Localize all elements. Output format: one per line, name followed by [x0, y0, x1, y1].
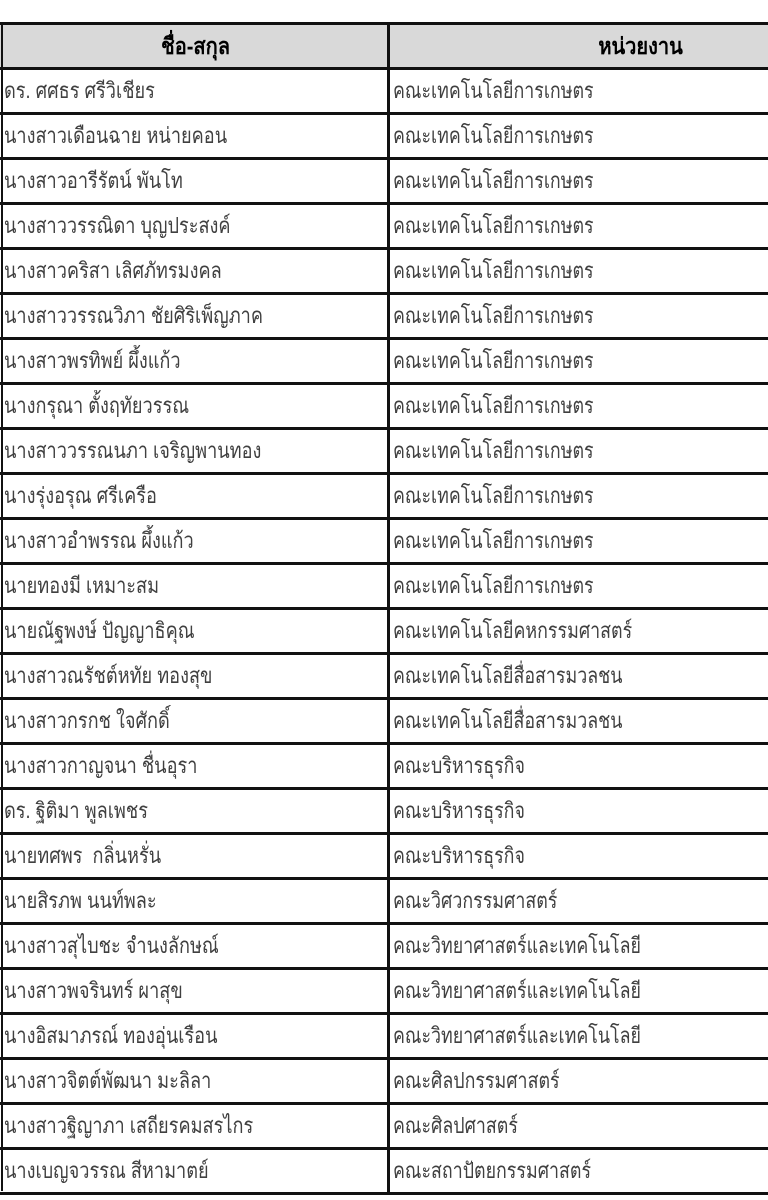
table: names and departments: คณะเทคโนโลยีคหกรรมศาสตร์	[392, 618, 632, 643]
table: names and departments: นายทองมี เหมาะสม	[4, 573, 159, 598]
table: names and departments: ชื่อ-สกุล	[161, 32, 230, 58]
table: names and departments: คณะเทคโนโลยีสื่อสารมวลชน	[392, 663, 622, 688]
table: names and departments: ดร. ศศธร ศรีวิเชียร	[4, 78, 155, 103]
table: names and departments: คณะเทคโนโลยีการเกษตร	[392, 483, 593, 508]
table: names and departments: นางสาววรรณิดา บุญประสงค์	[4, 213, 231, 238]
table: names and departments: นางรุ่งอรุณ ศรีเครือ	[4, 483, 157, 508]
table: names and departments: คณะบริหารธุรกิจ	[392, 798, 524, 823]
table: names and departments: นางสาววรรณนภา เจริญพานทอง	[4, 438, 261, 463]
table: names and departments: นางสาวพจรินทร์ ผาสุข	[4, 978, 183, 1003]
table: names and departments: นางสาวกาญจนา ชื่นอุรา	[4, 753, 197, 778]
table: names and departments: คณะบริหารธุรกิจ	[392, 843, 524, 868]
table: names and departments: นางสาวจิตต์พัฒนา มะลิลา	[4, 1068, 211, 1093]
table: names and departments: คณะเทคโนโลยีการเกษตร	[392, 213, 593, 238]
table: names and departments: นางเบญจวรรณ สีหามาตย์	[4, 1158, 209, 1183]
table: names and departments: คณะศิลปศาสตร์	[392, 1113, 517, 1138]
table: names and departments: คณะเทคโนโลยีการเกษตร	[392, 528, 593, 553]
table: names and departments: คณะวิทยาศาสตร์และเทคโนโลยี	[392, 933, 640, 958]
table: names and departments: คณะเทคโนโลยีการเกษตร	[392, 258, 593, 283]
table: names and departments: คณะเทคโนโลยีการเกษตร	[392, 78, 593, 103]
table: names and departments: คณะเทคโนโลยีการเกษตร	[392, 303, 593, 328]
table: names and departments: คณะเทคโนโลยีการเกษตร	[392, 438, 593, 463]
table: names and departments: คณะเทคโนโลยีการเกษตร	[392, 123, 593, 148]
table: names and departments: ดร. ฐิติมา พูลเพชร	[4, 798, 148, 823]
table: names and departments: นางสาวสุไบชะ จำนงลักษณ์	[4, 933, 219, 958]
table: names and departments: คณะศิลปกรรมศาสตร์	[392, 1068, 559, 1093]
table: names and departments: นางกรุณา ตั้งฤทัยวรรณ	[4, 393, 189, 418]
table: names and departments: นายสิรภพ นนท์พละ	[4, 888, 157, 913]
table: names and departments: คณะเทคโนโลยีการเกษตร	[392, 168, 593, 193]
table: names and departments: คณะบริหารธุรกิจ	[392, 753, 524, 778]
table: names and departments: คณะสถาปัตยกรรมศาสตร์	[392, 1158, 591, 1183]
table: names and departments: คณะเทคโนโลยีสื่อสารมวลชน	[392, 708, 622, 733]
table: names and departments: คณะวิทยาศาสตร์และเทคโนโลยี	[392, 1023, 640, 1048]
table: names and departments: นางสาวอารีรัตน์ พันโท	[4, 168, 183, 193]
table: names and departments: นางสาวฐิญาภา เสถียรคมสรไกร	[4, 1113, 253, 1138]
table: names and departments: นางสาวคริสา เลิศภัทรมงคล	[4, 258, 222, 283]
table: names and departments: คณะเทคโนโลยีการเกษตร	[392, 393, 593, 418]
table: names and departments: นางสาวกรกช ใจศักดิ์	[4, 708, 170, 733]
table: names and departments: นางสาววรรณวิภา ชัยศิริเพ็ญภาค	[4, 303, 263, 328]
table: names and departments: นางสาวอำพรรณ ผึ้งแก้ว	[4, 528, 194, 553]
table: names and departments: คณะวิทยาศาสตร์และเทคโนโลยี	[392, 978, 640, 1003]
table: names and departments: คณะเทคโนโลยีการเกษตร	[392, 348, 593, 373]
table: names and departments: นางสาวพรทิพย์ ผึ้งแก้ว	[4, 348, 181, 373]
table: names and departments: หน่วยงาน	[598, 32, 682, 58]
table: names and departments: นายทศพร กลิ่นหรั่น	[4, 843, 161, 868]
table: names and departments: คณะวิศวกรรมศาสตร์	[392, 888, 557, 913]
table: names and departments: คณะเทคโนโลยีการเกษตร	[392, 573, 593, 598]
table: names and departments: นายณัฐพงษ์ ปัญญาธิคุณ	[4, 618, 195, 643]
table: names and departments: นางอิสมาภรณ์ ทองอุ่นเรือน	[4, 1023, 217, 1048]
table: names and departments: นางสาวเดือนฉาย หน่ายคอน	[4, 123, 227, 148]
table: names and departments: นางสาวณรัชต์หทัย ทองสุข	[4, 663, 212, 688]
